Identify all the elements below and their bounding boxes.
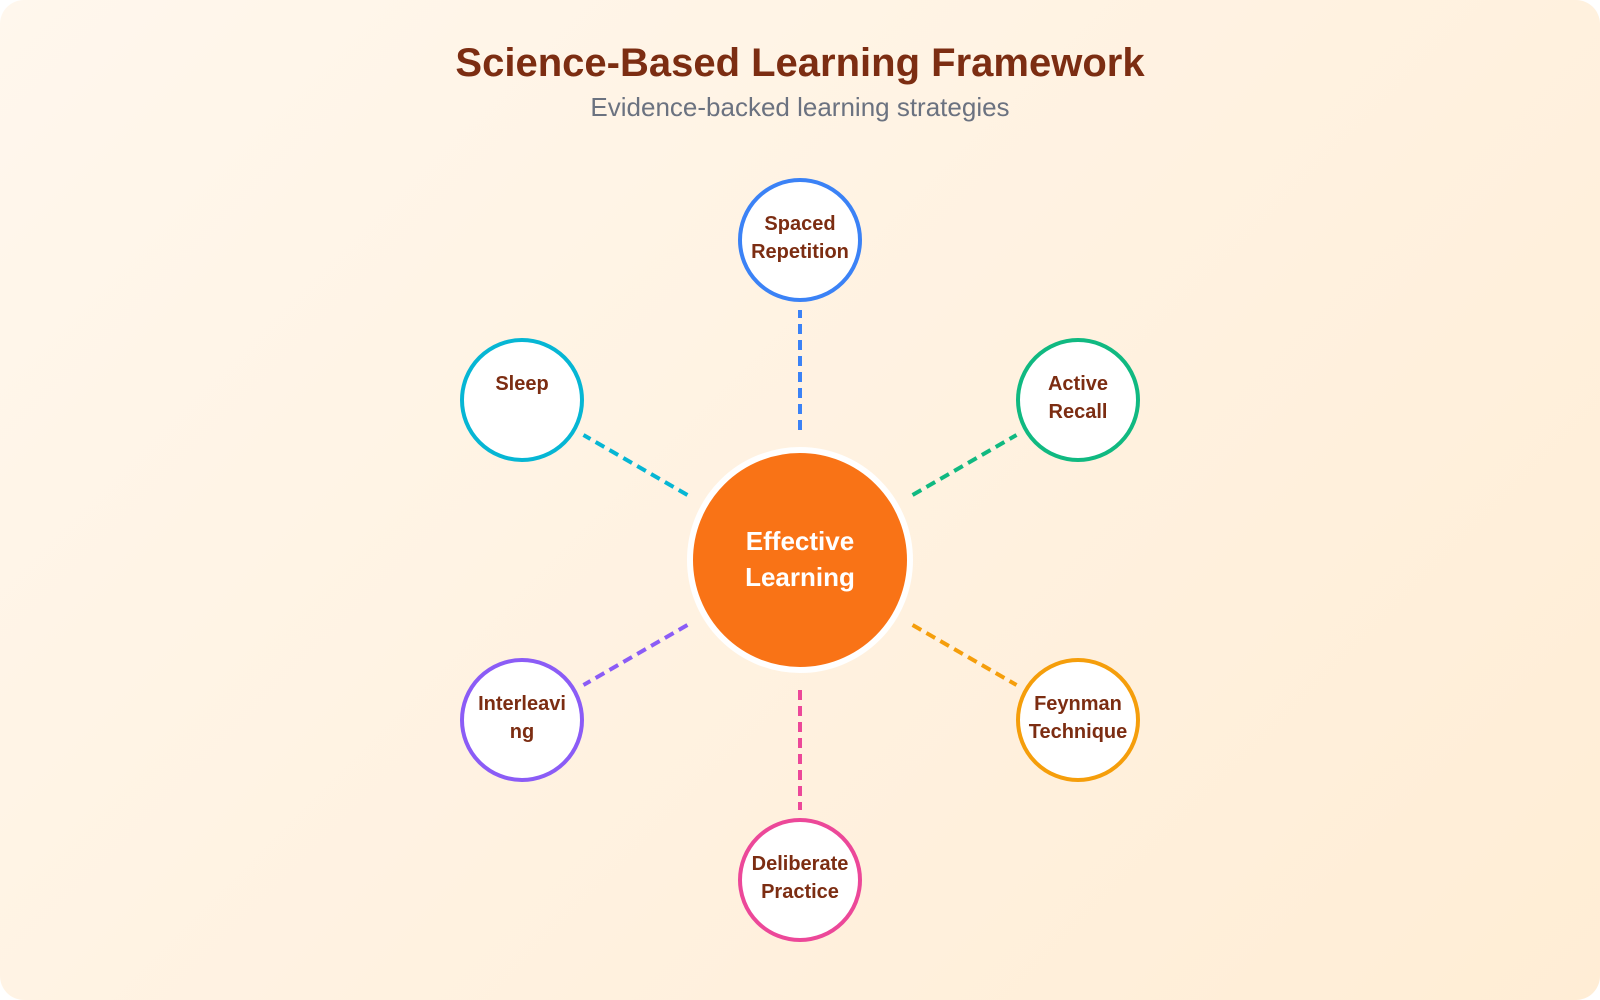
connector: active recall: [913, 435, 1017, 495]
node: sleep: [462, 340, 582, 460]
node: spaced repetition: Repetition: [751, 241, 849, 263]
node: sleep: Sleep: [495, 373, 549, 395]
node: deliberate practice: [740, 820, 860, 940]
node: spaced repetition: Spaced: [764, 213, 836, 235]
subtitle: Evidence-backed learning strategies: [590, 92, 1010, 122]
node: feynman technique: Feynman: [1034, 693, 1122, 715]
node: deliberate practice: Deliberate: [752, 853, 848, 875]
title: Science-Based Learning Framework: [455, 41, 1145, 85]
node: feynman technique: Technique: [1029, 721, 1127, 743]
node: spaced repetition: [740, 180, 860, 300]
node: interleaving: Interleavi: [478, 693, 566, 715]
node: feynman technique: [1018, 660, 1138, 780]
central hub: effective learning: [690, 450, 910, 670]
connector: sleep: [583, 435, 687, 495]
central hub: effective learning: Effective: [746, 526, 854, 556]
central hub: effective learning: Learning: [745, 562, 855, 592]
connector: spaced repetition: [798, 310, 802, 430]
connector: interleaving: [583, 625, 687, 685]
connector: deliberate practice: [798, 690, 802, 810]
connector: feynman technique: [913, 625, 1017, 685]
node: interleaving: [462, 660, 582, 780]
node: active recall: [1018, 340, 1138, 460]
node: active recall: Recall: [1049, 401, 1107, 423]
node: active recall: Active: [1048, 373, 1108, 395]
node: deliberate practice: Practice: [761, 881, 839, 903]
node: interleaving: ng: [510, 721, 534, 743]
